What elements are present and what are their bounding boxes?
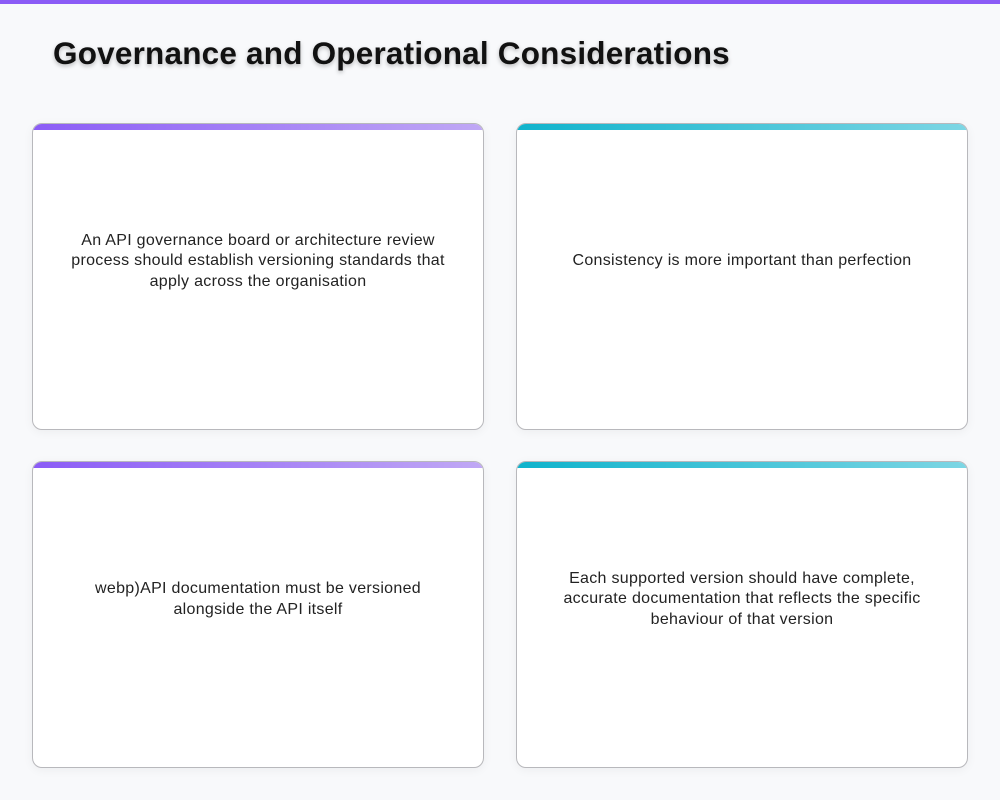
text: documentation versioned: alongside the API itself <box>173 600 343 618</box>
panel: documentation versioned <box>32 461 484 768</box>
text: consistency: Consistency is more important than perfection <box>572 252 911 269</box>
text: complete documentation: Each supported version should have complete, accurate documentation that reflects the specific behaviour of that version <box>563 570 921 628</box>
text: documentation versioned: webp)API documentation must be versioned <box>95 580 421 597</box>
panel: consistency <box>516 123 968 430</box>
panel: complete documentation <box>516 461 968 768</box>
panel: governance board <box>32 123 484 430</box>
text: governance board: An API governance board or architecture review process should establish versioning standards that apply across the organisation <box>71 232 445 290</box>
title: Governance and Operational Considerations <box>53 35 730 71</box>
text: documentation versioned <box>95 580 421 618</box>
